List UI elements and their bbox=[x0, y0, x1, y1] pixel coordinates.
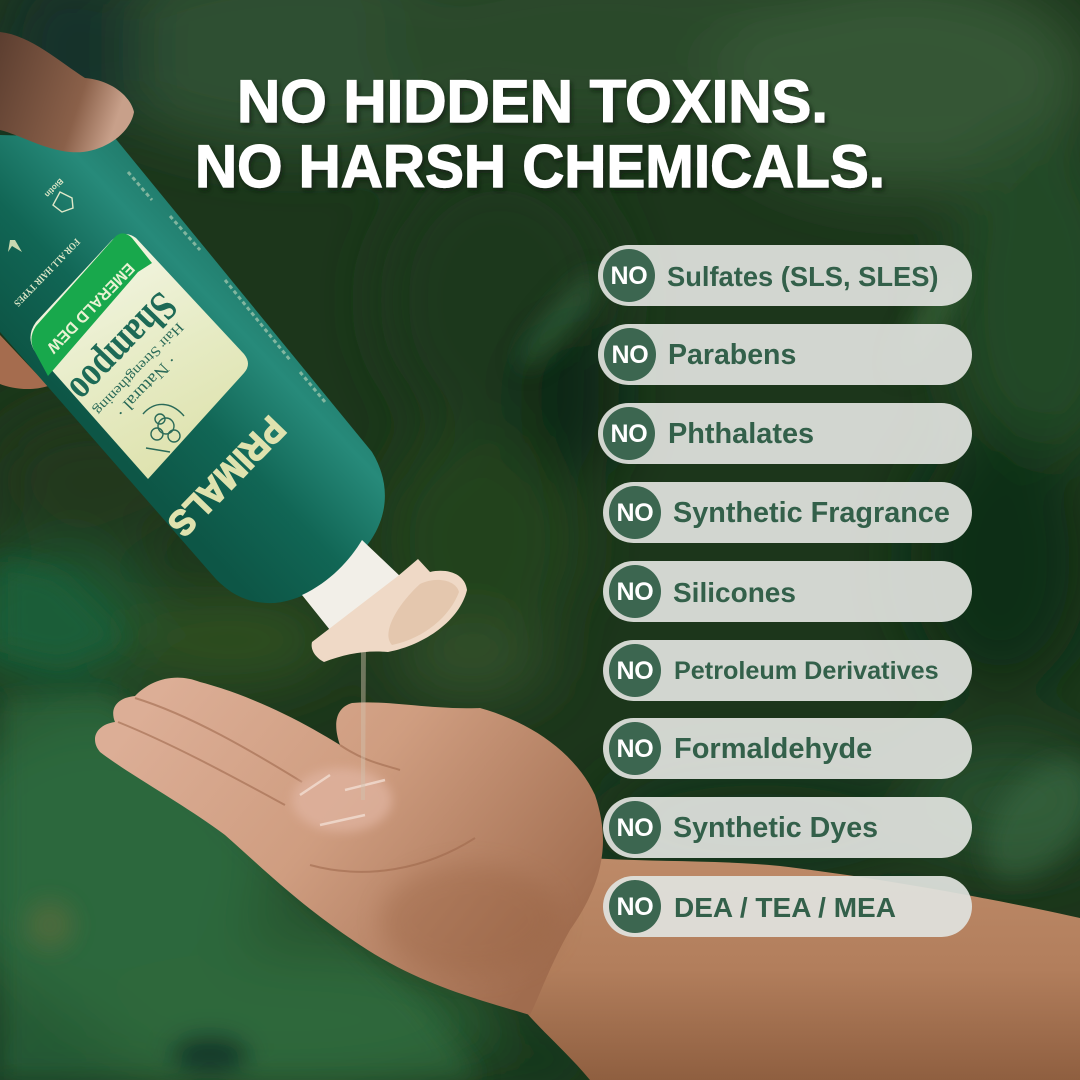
text: hair strengthening: Hair Strengthening bbox=[90, 319, 186, 417]
pill: synthetic fragrance: NO bbox=[617, 499, 653, 527]
arm bbox=[520, 858, 1080, 1080]
title line 2: NO HARSH CHEMICALS. bbox=[195, 133, 885, 200]
pill: synthetic fragrance bbox=[603, 482, 972, 543]
title line 1: NO HIDDEN TOXINS. bbox=[237, 68, 828, 135]
pill: petroleum derivatives: NO bbox=[617, 657, 653, 685]
pill: formaldehyde: NO bbox=[617, 735, 653, 763]
pill: petroleum derivatives bbox=[603, 640, 972, 701]
pill: parabens: NO bbox=[612, 341, 648, 369]
pill: sulfates: Sulfates (SLS, SLES) bbox=[667, 261, 939, 292]
pill: dea tea mea: NO bbox=[617, 893, 653, 921]
pill: silicones bbox=[603, 561, 972, 622]
pill: synthetic dyes: Synthetic Dyes bbox=[673, 812, 878, 844]
brand name: PRIMALS bbox=[160, 408, 294, 545]
icon: flower logo bbox=[143, 404, 184, 452]
pill: phthalates: NO bbox=[611, 420, 647, 448]
pill: parabens bbox=[598, 324, 972, 385]
title bbox=[195, 68, 885, 200]
pill: dea tea mea bbox=[603, 876, 972, 937]
pill: parabens: Parabens bbox=[668, 339, 796, 371]
pill: synthetic dyes: NO bbox=[617, 814, 653, 842]
text: for all hair types: FOR ALL HAIR TYPES bbox=[11, 236, 82, 309]
pill: synthetic dyes bbox=[603, 797, 972, 858]
icon: rosemary leaf bbox=[8, 240, 22, 252]
shampoo stream bbox=[361, 645, 366, 800]
flip cap bbox=[312, 559, 467, 662]
front label bbox=[30, 234, 248, 479]
pill: dea tea mea: DEA / TEA / MEA bbox=[674, 892, 896, 923]
thumb holding bottle bbox=[0, 32, 134, 152]
pill: silicones: Silicones bbox=[673, 577, 796, 608]
pill: phthalates: Phthalates bbox=[668, 418, 814, 450]
neck bbox=[302, 540, 402, 640]
pill: phthalates bbox=[598, 403, 972, 464]
hand with open palm bbox=[95, 678, 603, 1015]
pill: petroleum derivatives: Petroleum Derivatives bbox=[674, 657, 939, 685]
text: shampoo: Shampoo bbox=[60, 283, 186, 411]
fingers holding bottle, behind bbox=[0, 335, 48, 389]
emerald band bbox=[31, 233, 152, 376]
pill: synthetic fragrance: Synthetic Fragrance bbox=[673, 497, 950, 529]
shampoo pool on palm bbox=[292, 768, 392, 832]
icon: b7 biotin badge bbox=[53, 192, 73, 212]
pill: sulfates: NO bbox=[611, 262, 647, 290]
text: emerald dew: EMERALD DEW bbox=[43, 259, 137, 357]
pill: sulfates bbox=[598, 245, 972, 306]
pill: formaldehyde bbox=[603, 718, 972, 779]
palm creases and shading bbox=[118, 698, 475, 872]
side text lines bbox=[128, 172, 325, 402]
pill: silicones: NO bbox=[617, 578, 653, 606]
shampoo bottle bbox=[0, 135, 467, 662]
text: biotin: Biotin bbox=[43, 177, 65, 199]
text: natural: · Natural · bbox=[112, 351, 181, 422]
pill: formaldehyde: Formaldehyde bbox=[674, 733, 872, 765]
